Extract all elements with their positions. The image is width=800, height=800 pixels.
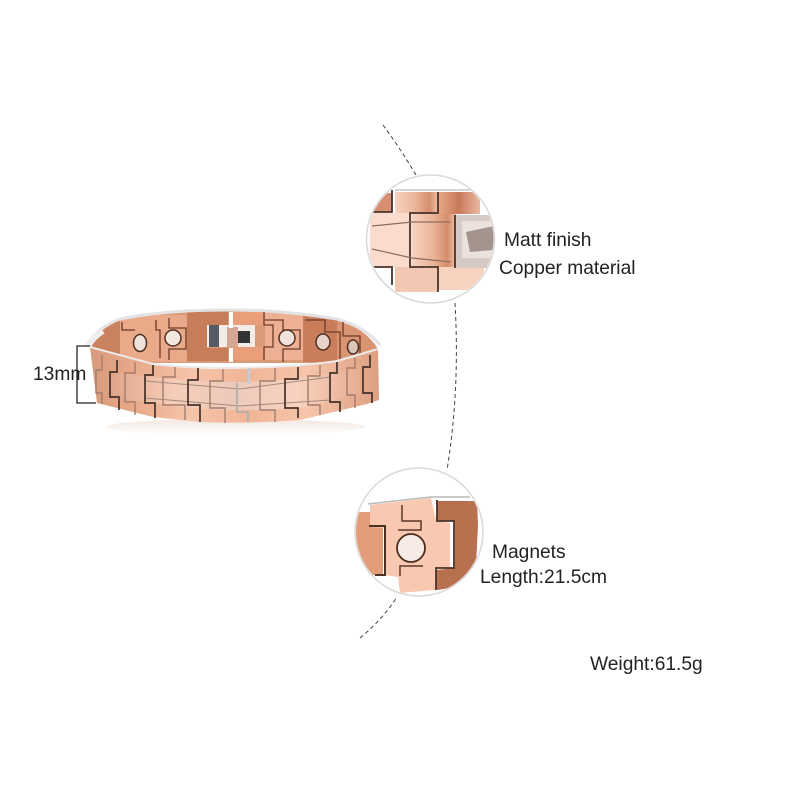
bracelet back band [86,308,381,363]
label: finish and material: Copper material [499,258,636,279]
dimension bracket [77,346,96,403]
bracelet front band [90,347,379,423]
callout circle: magnet detail [355,468,483,596]
label: weight: Weight:61.5g [590,654,703,675]
magnet [279,330,295,346]
label: magnets and length [480,542,607,588]
magnet [397,534,425,562]
silver rim [87,310,380,345]
label: magnets and length: Length:21.5cm [480,567,607,588]
label: width: 13mm [33,364,86,385]
dashed connector: upper callout [360,125,456,638]
label: finish and material: Matt finish [504,230,591,251]
magnet [348,340,358,354]
bracelet [86,308,381,431]
bracelet floor shadow [105,419,365,435]
magnet [165,330,181,346]
clasp [207,312,255,362]
label: finish and material [499,230,636,279]
magnet [316,334,330,350]
magnet [134,334,146,352]
label: magnets and length: Magnets [492,542,566,563]
infographic canvas [34,124,702,674]
callout circle: matt finish detail [366,175,495,303]
